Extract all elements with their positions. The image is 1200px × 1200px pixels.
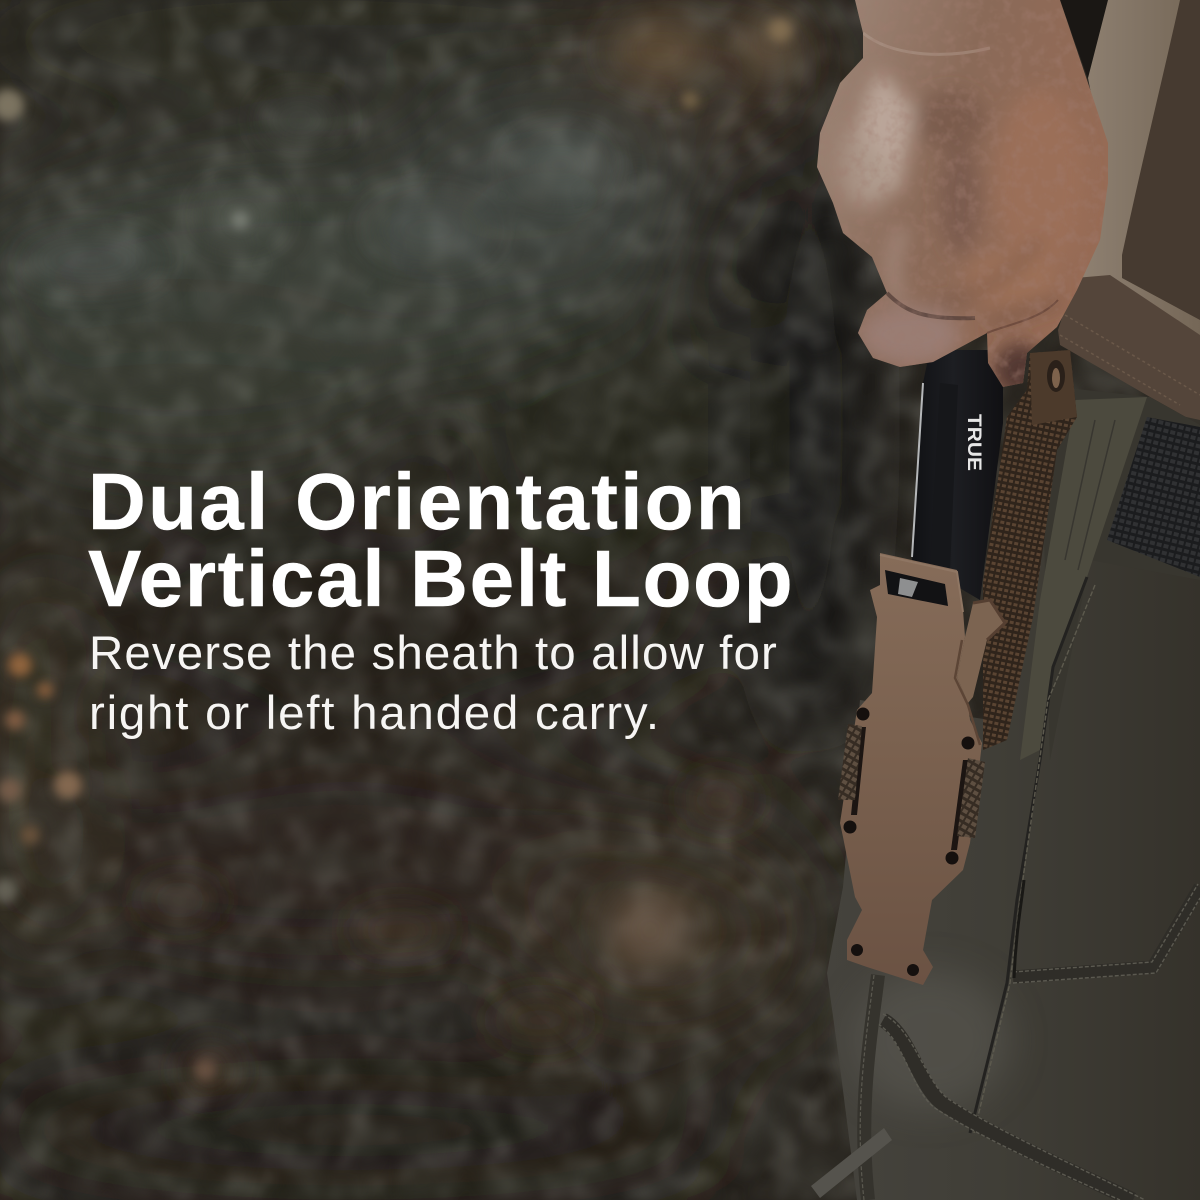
description: right or left handed carry. <box>89 687 661 740</box>
belt <box>1107 417 1200 577</box>
heading: Dual Orientation <box>88 457 747 546</box>
heading <box>88 457 794 623</box>
sheath <box>838 553 1005 985</box>
knife blade with TRUE logo <box>912 350 1003 600</box>
webbing strap <box>983 350 1077 750</box>
sheath rivet holes <box>844 708 974 976</box>
shirt <box>1058 0 1200 425</box>
description: Reverse the sheath to allow for <box>89 627 778 680</box>
description <box>89 627 778 740</box>
logo: TRUE: TRUE <box>963 414 984 471</box>
hand gripping knife <box>810 0 1120 396</box>
sheath lash slots <box>851 727 969 850</box>
text block: headline and description <box>88 457 794 740</box>
paracord lashing <box>838 724 985 838</box>
heading: Vertical Belt Loop <box>88 534 794 623</box>
trousers <box>811 385 1200 1200</box>
